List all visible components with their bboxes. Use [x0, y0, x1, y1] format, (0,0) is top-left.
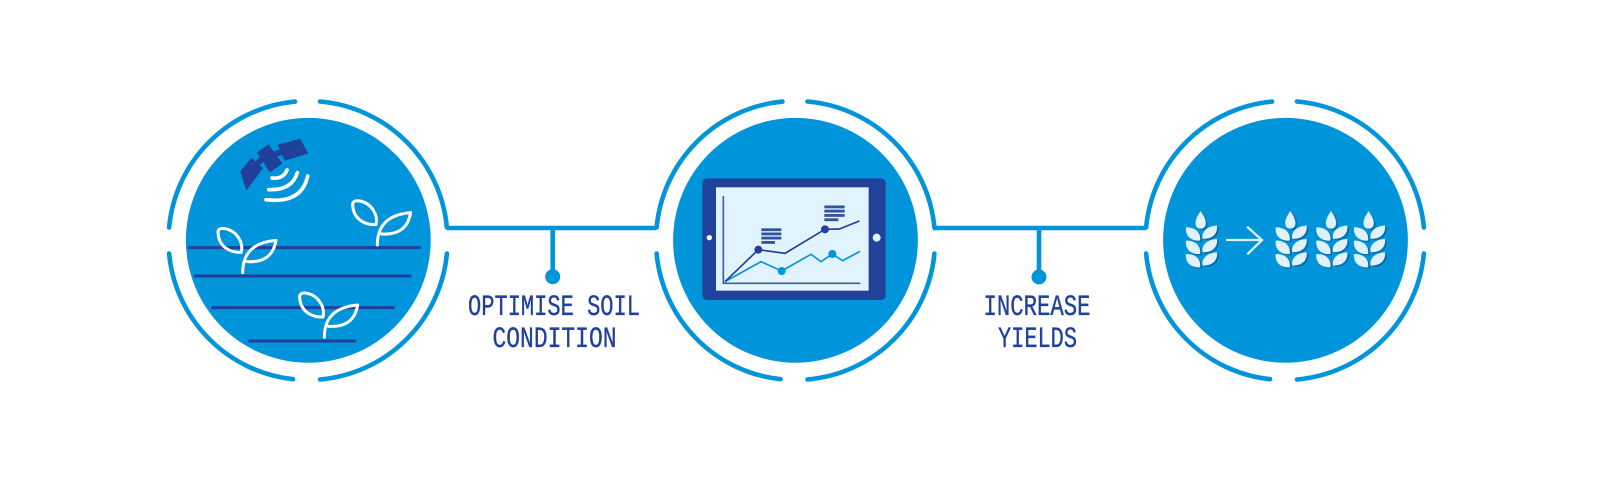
tablet button [873, 234, 881, 242]
icon: wheat after 1 [1276, 211, 1308, 269]
label: optimise soil condition: OPTIMISE SOIL [468, 291, 640, 325]
tablet screen [716, 187, 869, 291]
label: increase yields [984, 291, 1090, 357]
icon: tablet with charts [702, 178, 886, 300]
panel: yields circle [1146, 102, 1424, 380]
icon: wheat before [1186, 211, 1219, 269]
disc: tablet panel [673, 118, 918, 363]
chart note right [824, 205, 845, 221]
label: increase yields: INCREASE [984, 291, 1090, 325]
tablet camera [707, 235, 712, 240]
chart axes [723, 196, 860, 283]
connector: tablet to wheat [933, 228, 1146, 284]
panel: tablet circle [657, 102, 934, 380]
icon: sprout left [218, 228, 276, 273]
ring: yields panel [1146, 102, 1424, 380]
connector: soil to tablet [447, 228, 656, 284]
soil lines [189, 248, 419, 341]
ring: tablet panel [657, 102, 934, 380]
chart note left [761, 228, 781, 244]
icon: wheat after 2 [1316, 211, 1349, 269]
label: optimise soil condition: CONDITION [492, 323, 616, 357]
chart: dark line [725, 221, 859, 282]
icon: sprout lower [300, 293, 358, 337]
label: optimise soil condition [468, 291, 640, 357]
icon: sprout upper right [353, 201, 411, 245]
disc: yields panel [1163, 118, 1408, 363]
icons: wheat and arrow [1186, 211, 1387, 269]
tablet body [702, 178, 886, 300]
icon: wheat after 3 [1354, 211, 1387, 269]
label: increase yields: YIELDS [998, 323, 1077, 357]
icon: satellite [241, 139, 308, 189]
icon: arrow [1226, 227, 1262, 254]
icon: satellite signal [266, 170, 308, 200]
illustration: field with satellite [189, 139, 419, 341]
panel: soil monitoring circle [169, 102, 447, 380]
ring: soil panel [169, 102, 447, 380]
disc: soil panel [186, 118, 431, 363]
chart: light line [725, 250, 860, 282]
